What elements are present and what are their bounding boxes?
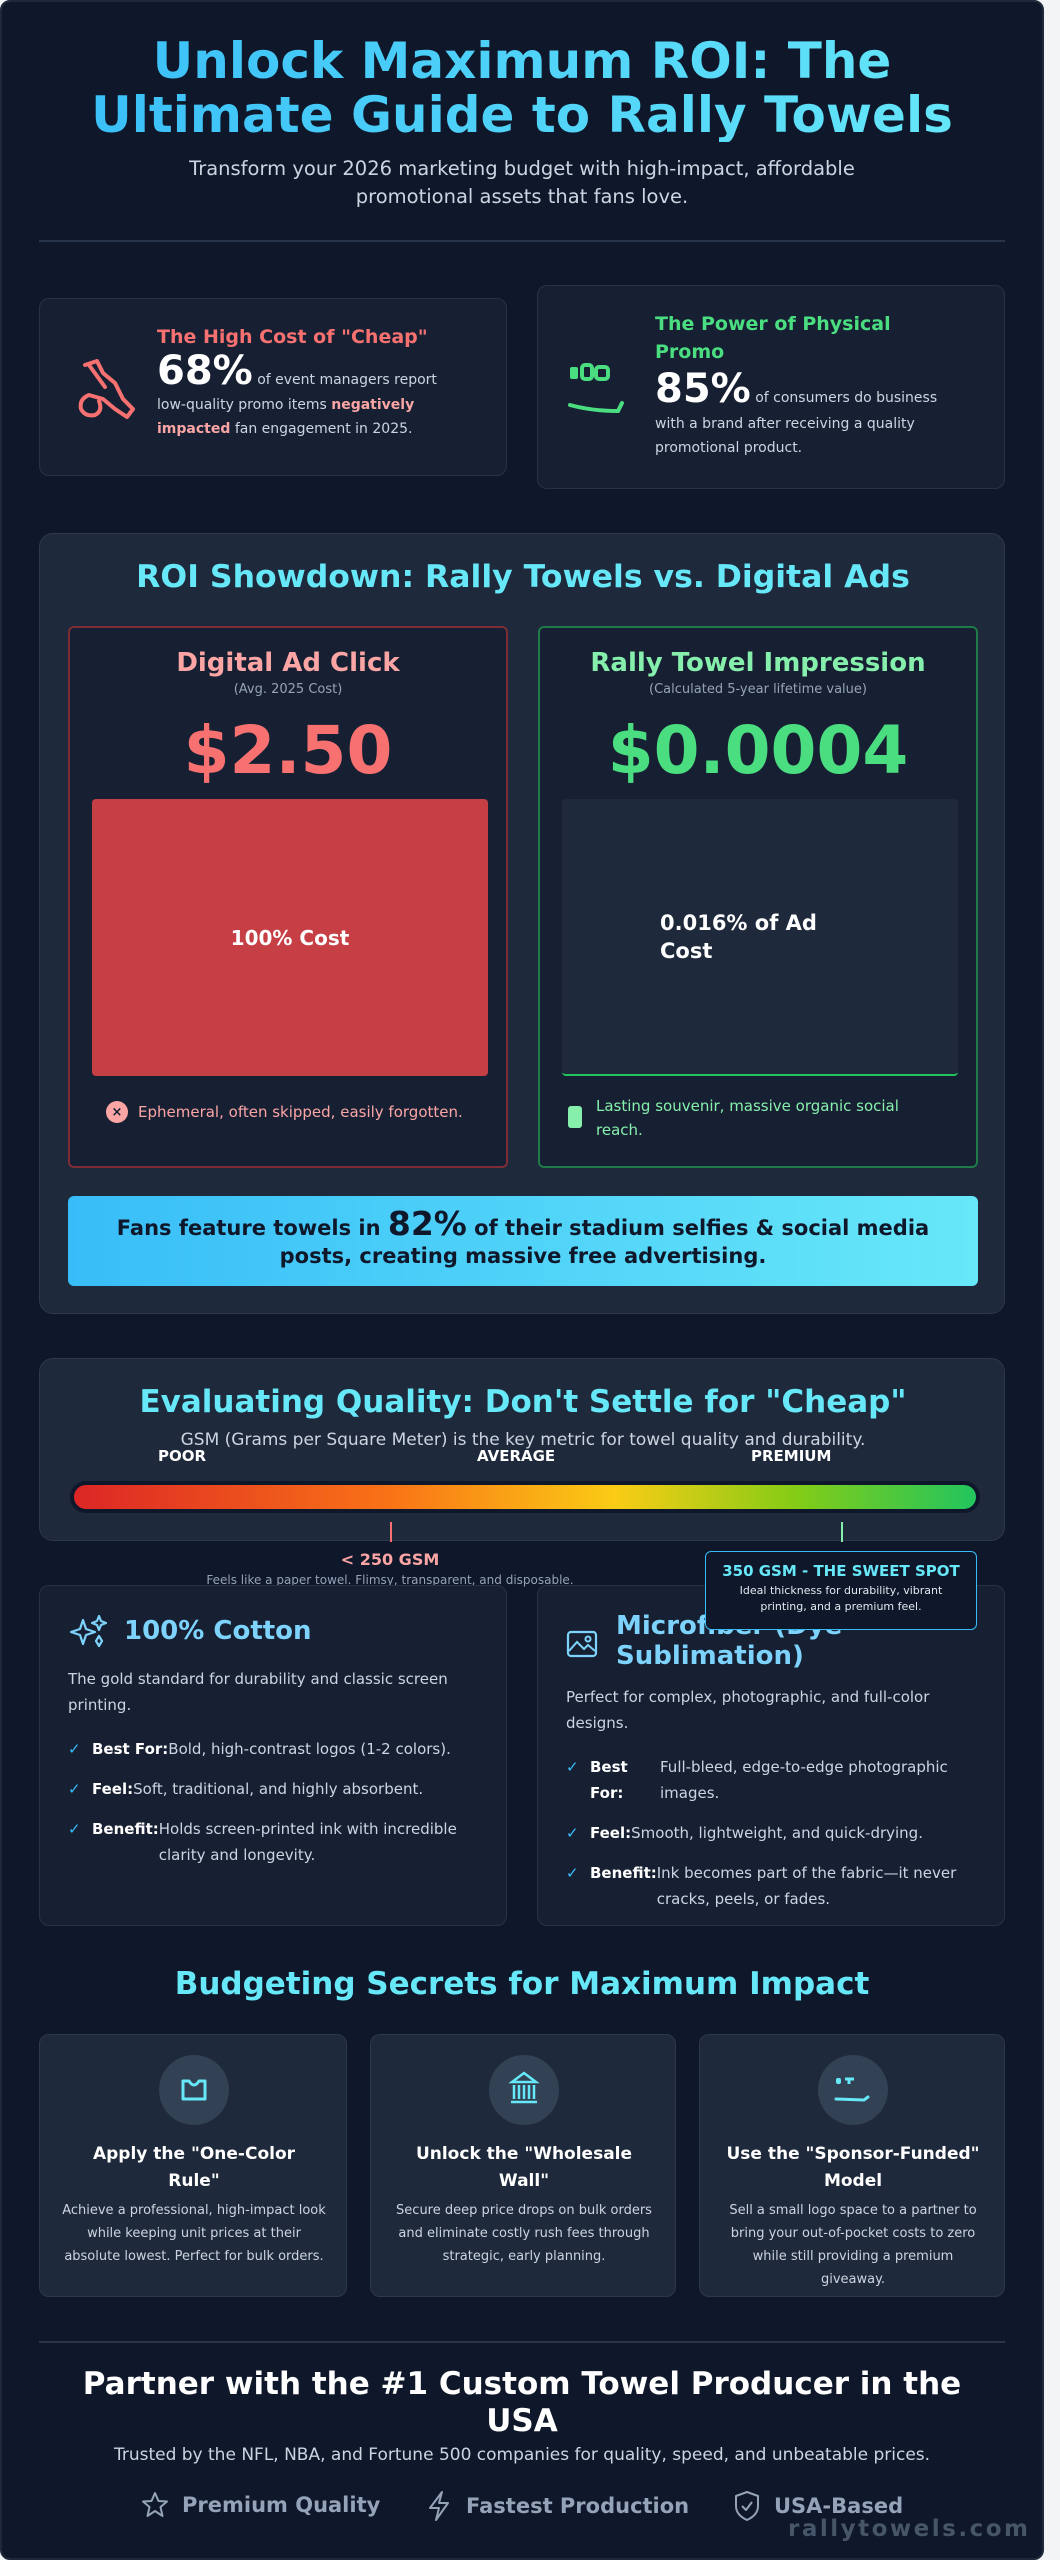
gauge labels: POOR: [158, 1447, 206, 1465]
badge: fastest production: [429, 2491, 689, 2521]
list: Benefit:: [590, 1864, 657, 1882]
heading: ROI Showdown: Rally Towels vs. Digital Ads: [136, 559, 910, 595]
callout: sweet spot: Ideal thickness for durability, vibrant: [740, 1584, 942, 1597]
heading: Evaluating Quality: Don't Settle for "Cheap": [140, 1384, 906, 1420]
list: Holds screen-printed ink with incredible clarity and longevity.: [159, 1820, 457, 1864]
card: one-color rule: [39, 2034, 347, 2297]
bar: Cost: [660, 939, 712, 963]
bar: [92, 799, 488, 1076]
heading: budgeting: Budgeting Secrets for Maximum Impact: [175, 1966, 869, 2002]
list: Best For:: [590, 1758, 628, 1802]
description: The gold standard for durability and classic screen printing.: [68, 1670, 448, 1714]
list: ✓: [566, 1864, 579, 1882]
card: one-color rule: Achieve a professional, high-impact look while keeping unit prices at their absolute lowest. Perfect for bulk orders.: [62, 2203, 326, 2264]
list: Best For:: [92, 1740, 168, 1758]
heading: [616, 1611, 842, 1671]
title: Ultimate Guide to Rally Towels: [91, 86, 953, 144]
callout banner: Fans feature towels in 82% of their stadium selfies & social media: [117, 1204, 929, 1243]
list: ✓: [68, 1820, 81, 1838]
panel: quality gauge: PREMIUM: [751, 1447, 831, 1465]
icon: sparkles: [70, 1614, 108, 1648]
marker: poor: < 250 GSM: [341, 1550, 439, 1569]
icon: image: [566, 1630, 598, 1658]
badge: usa-based: USA-Based: [774, 2494, 903, 2518]
callout: sweet spot: [705, 1551, 977, 1630]
description: Perfect for complex, photographic, and full-color designs.: [566, 1688, 929, 1732]
badge: usa-based: [735, 2491, 903, 2521]
callout: sweet spot: printing, and a premium feel.: [760, 1600, 922, 1613]
panel: cotton: [39, 1585, 507, 1926]
badge: fastest production: Fastest Production: [466, 2494, 689, 2518]
list: Feel:: [590, 1824, 631, 1842]
price: $2.50: [184, 712, 392, 789]
badge: premium quality: Premium Quality: [182, 2493, 380, 2517]
icon: broken item: [78, 359, 136, 419]
panel: quality gauge: [39, 1358, 1005, 1541]
title: Unlock Maximum ROI: The: [153, 32, 891, 90]
price: $0.0004: [608, 712, 908, 789]
callout banner: [68, 1196, 978, 1286]
list: Bold, high-contrast logos (1-2 colors).: [168, 1740, 451, 1758]
card: sponsor-funded: [699, 2034, 1005, 2297]
marker: poor: Feels like a paper towel. Flimsy, transparent, and disposable.: [206, 1573, 574, 1587]
marker: poor: [206, 1550, 574, 1587]
stat text: 85% of consumers do business with a brand after receiving a quality promotional product.: [655, 366, 937, 456]
stat card: power of physical promo: [537, 285, 1005, 489]
list: Smooth, lightweight, and quick-drying.: [631, 1824, 923, 1842]
heading: Microfiber (Dye: [616, 1611, 842, 1641]
note: ×: [112, 1104, 122, 1120]
list: Soft, traditional, and highly absorbent.: [133, 1780, 423, 1798]
heading: Sublimation): [616, 1641, 804, 1671]
list: [68, 1740, 457, 1864]
list: Feel:: [92, 1780, 133, 1798]
list: ✓: [566, 1758, 579, 1776]
gauge bar: [70, 1481, 980, 1513]
card: one-color rule: Apply the "One-Color Rule": [93, 2144, 295, 2191]
subtitle: Transform your 2026 marketing budget with high-impact, affordable promotional assets that fans love.: [189, 157, 855, 208]
subtitle: GSM (Grams per Square Meter) is the key metric for towel quality and durability.: [181, 1430, 865, 1450]
card: rally towel: [538, 626, 978, 1168]
card: digital ad: Digital Ad Click: [176, 648, 400, 678]
badges: [142, 2491, 903, 2521]
icon: money hand: [568, 363, 624, 413]
stat text: The High Cost of "Cheap": [157, 326, 428, 348]
list: ✓: [68, 1780, 81, 1798]
card: sponsor-funded: Sell a small logo space to a partner to bring your out-of-pocket costs to zero while still providing a premium giveaway.: [729, 2203, 977, 2287]
panel: microfiber: [537, 1585, 1005, 1926]
panel: ROI showdown: [39, 533, 1005, 1314]
card: digital ad: [68, 626, 508, 1168]
list: Benefit:: [92, 1820, 159, 1838]
callout banner: posts, creating massive free advertising.: [280, 1244, 766, 1268]
card: wholesale wall: Unlock the "Wholesale Wall": [416, 2144, 632, 2191]
list: ✓: [566, 1824, 579, 1842]
bar: 100% Cost: [231, 926, 349, 950]
list: [566, 1758, 956, 1908]
card: sponsor-funded: Use the "Sponsor-Funded" Model: [726, 2144, 980, 2191]
closing heading: Partner with the #1 Custom Towel Producer in the USA: [83, 2366, 961, 2439]
heading: 100% Cotton: [124, 1616, 312, 1646]
panel: quality gauge: AVERAGE: [477, 1447, 555, 1465]
icon: handshake: [818, 2055, 888, 2125]
title: [40, 34, 1004, 142]
card: rally towel: (Calculated 5-year lifetime value): [649, 682, 867, 697]
list: ✓: [68, 1740, 81, 1758]
closing text: Trusted by the NFL, NBA, and Fortune 500 companies for quality, speed, and unbeatable prices.: [114, 2445, 930, 2465]
bar: 0.016% of Ad: [660, 911, 817, 935]
bar: [562, 799, 958, 1076]
watermark: rallytowels.com: [788, 2516, 1030, 2542]
icon: towel: [159, 2055, 229, 2125]
note: Ephemeral, often skipped, easily forgotten.: [138, 1103, 463, 1121]
stat card: high cost of cheap: [39, 298, 507, 476]
stat text: [655, 313, 937, 456]
list: Ink becomes part of the fabric—it never cracks, peels, or fades.: [657, 1864, 956, 1908]
card: wholesale wall: Secure deep price drops on bulk orders and eliminate costly rush fees through strategic, early planning.: [396, 2203, 652, 2264]
stat text: 68% of event managers report low-quality promo items negatively impacted fan engagement in 2025.: [157, 348, 437, 437]
card: rally towel: Rally Towel Impression: [590, 648, 926, 678]
icon: bank: [489, 2055, 559, 2125]
list: Full-bleed, edge-to-edge photographic images.: [660, 1758, 948, 1802]
card: digital ad: (Avg. 2025 Cost): [234, 682, 342, 697]
card: wholesale wall: [370, 2034, 676, 2297]
callout: sweet spot: 350 GSM - THE SWEET SPOT: [722, 1562, 960, 1580]
stat text: The Power of Physical Promo: [655, 313, 891, 363]
note: Lasting souvenir, massive organic social reach.: [596, 1097, 899, 1139]
